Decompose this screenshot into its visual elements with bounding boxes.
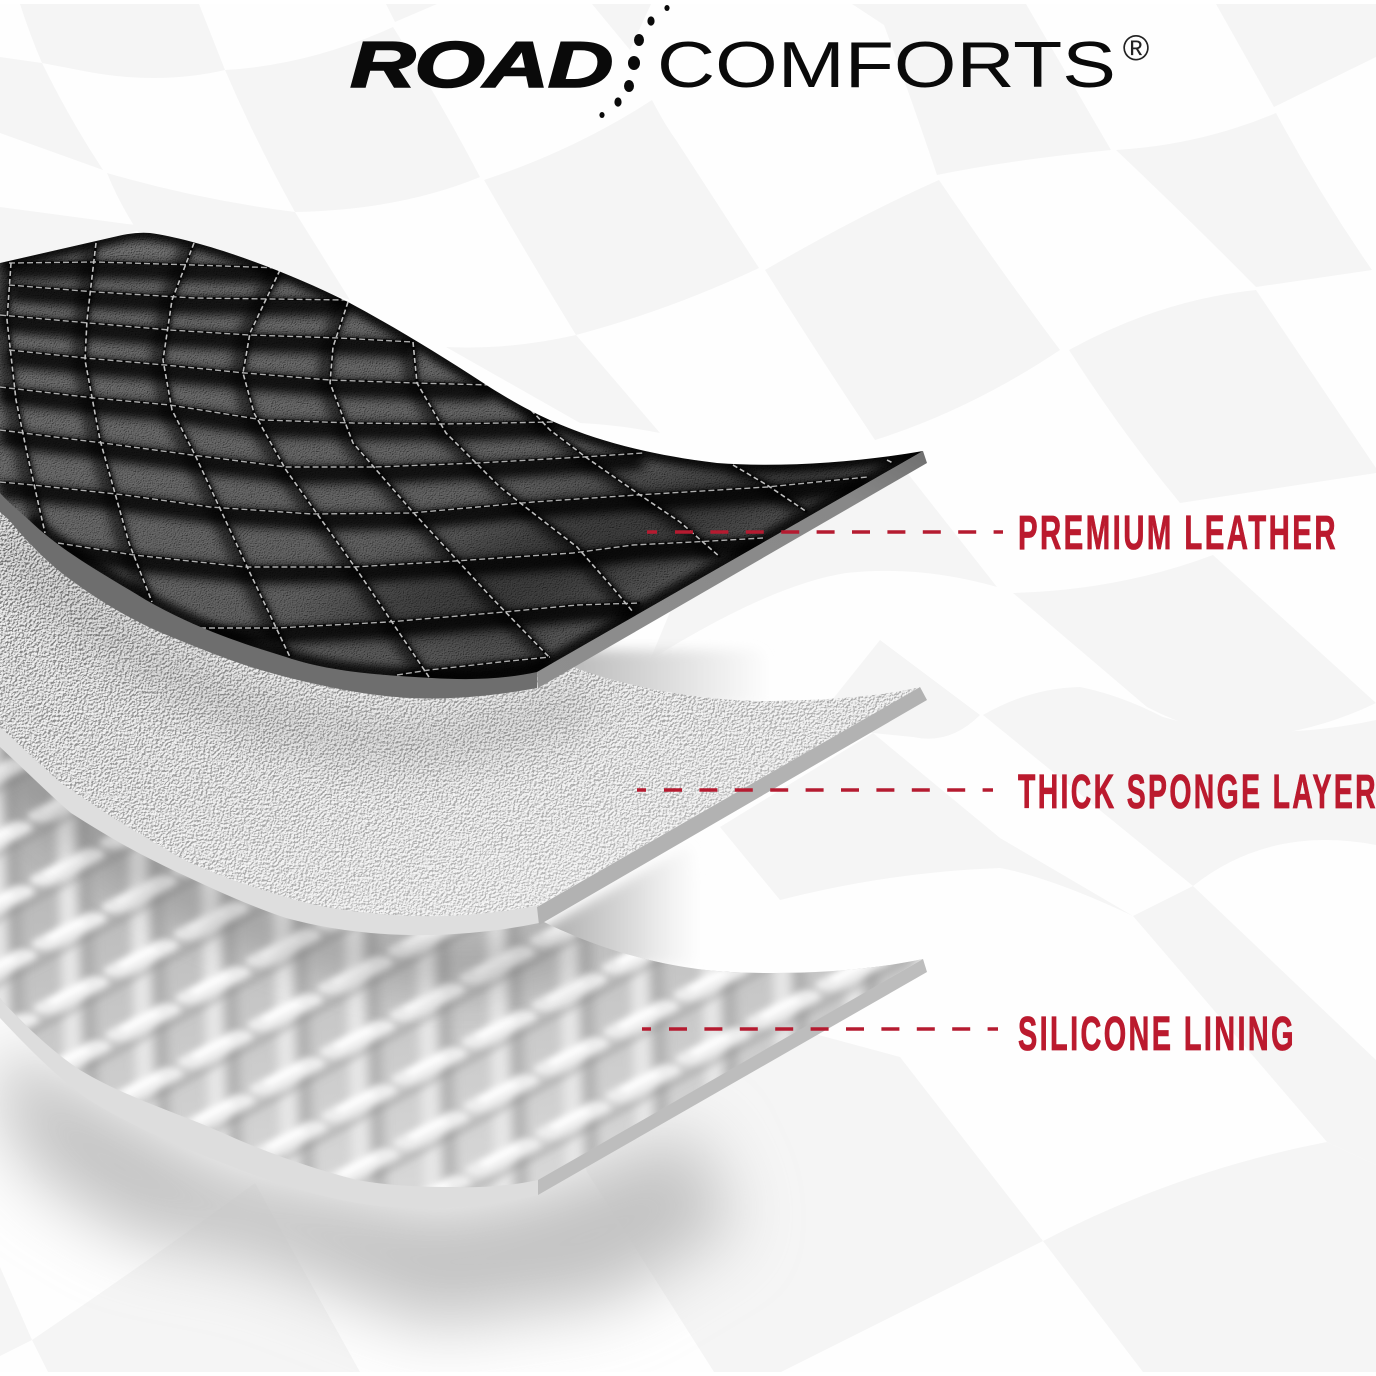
- silicone front edge: [0, 990, 538, 1208]
- logo wordmark ROAD: ROAD: [350, 28, 612, 101]
- leather right edge: [537, 451, 927, 688]
- leather quilted surface: [0, 225, 930, 685]
- layer: thick sponge: [0, 470, 930, 935]
- dashed leader: [637, 788, 993, 792]
- sponge right edge: [537, 687, 927, 925]
- drop shadows under the layers: [0, 650, 810, 1325]
- silicone quilted surface: [0, 747, 922, 1188]
- layer: silicone lining: [0, 747, 927, 1198]
- darker lower right cells: [322, 464, 866, 652]
- layer: premium leather: [0, 225, 930, 698]
- logo wordmark COMFORTS: COMFORTS: [657, 28, 1116, 101]
- dashed leader: [642, 1027, 998, 1031]
- registered mark: ®: [1123, 27, 1149, 68]
- logo dots: [599, 5, 670, 118]
- silicone right edge: [538, 959, 927, 1195]
- leather front edge: [0, 480, 537, 698]
- sponge textured surface: [0, 512, 919, 916]
- dashed leader: [647, 530, 1003, 534]
- stitching: [0, 243, 893, 677]
- edge darkening: [0, 233, 923, 465]
- sponge front edge: [0, 715, 539, 935]
- seam shadows: [0, 243, 893, 683]
- logo: Road Comforts: [350, 5, 1149, 118]
